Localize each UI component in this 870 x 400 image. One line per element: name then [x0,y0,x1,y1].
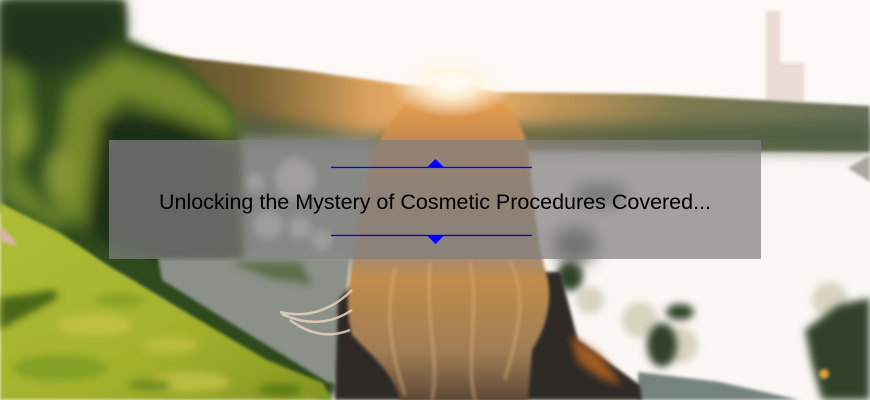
far bank shadow [140,95,870,170]
dark band below the slope ridge [60,235,340,400]
water [480,150,870,400]
bokeh town behind the panel [215,140,375,265]
path and railing below the panel [158,258,350,382]
bottom ornament: line with blue triangle [331,234,532,244]
grassy slope [0,203,332,400]
left hair wisps [280,290,352,334]
hair strands [390,262,520,400]
left trees [0,0,242,285]
woman: long hair [348,82,549,400]
person on slope [0,225,18,246]
river bank at right [848,155,870,182]
top ornament: line with blue triangle [331,159,532,168]
foreground foliage on the right [576,282,848,363]
sun glow [390,50,514,118]
orange bokeh dot [819,369,829,379]
title text: Unlocking the Mystery of Cosmetic Procedures Covered... [159,190,711,214]
far hillside [125,46,870,200]
strip of bushes on the path edge [230,262,312,285]
grass shadows and highlights [0,290,302,396]
fence by the water [638,372,800,400]
title panel [109,140,761,259]
jacket orange lace highlight [570,335,622,385]
reflection of foliage behind panel [553,185,628,263]
woman: dark jacket [335,272,642,400]
distant tower [766,11,804,102]
